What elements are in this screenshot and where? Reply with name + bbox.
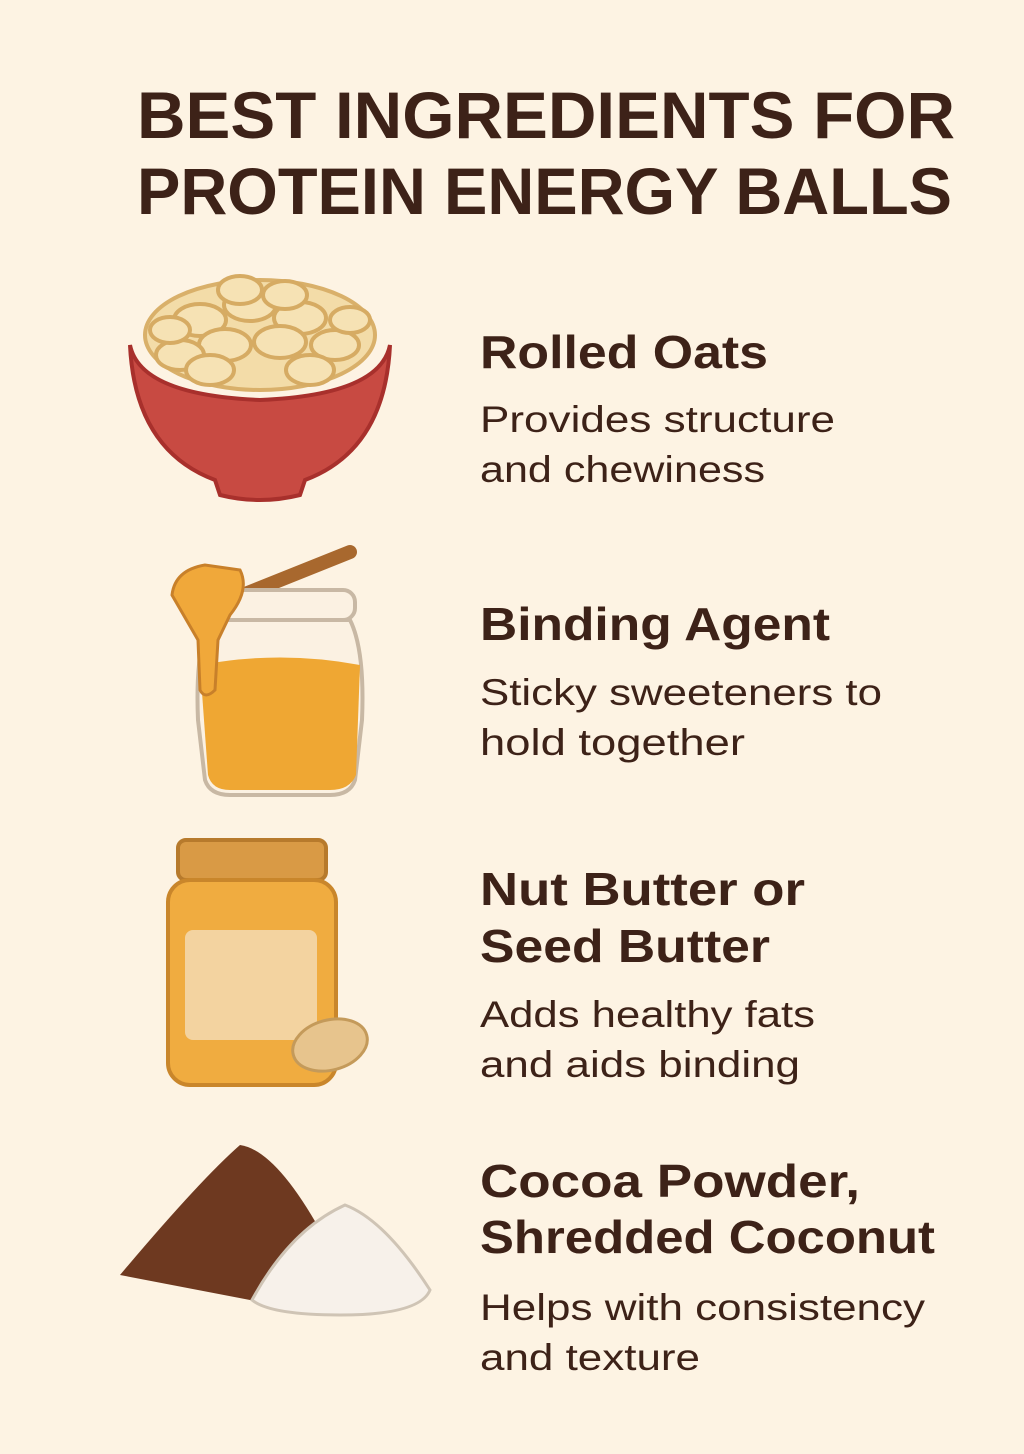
- text: binding agent: Sticky sweeteners to: [480, 672, 882, 713]
- text: cocoa coconut: Shredded Coconut: [480, 1211, 935, 1263]
- text: nut butter: Nut Butter or: [480, 863, 805, 915]
- text: nut butter: and aids binding: [480, 1044, 800, 1085]
- text: cocoa coconut: [480, 1155, 935, 1378]
- text: cocoa coconut: and texture: [480, 1337, 700, 1378]
- title: BEST INGREDIENTS FOR: [137, 78, 955, 152]
- title: [137, 78, 955, 228]
- text: cocoa coconut: Helps with consistency: [480, 1287, 926, 1328]
- icon: honey jar: [172, 552, 362, 795]
- icon: cocoa and coconut powder: [120, 1145, 430, 1315]
- icon: bowl of oats: [130, 276, 390, 500]
- text: nut butter: Seed Butter: [480, 920, 770, 972]
- title: PROTEIN ENERGY BALLS: [137, 154, 952, 228]
- text: rolled oats: [480, 326, 835, 490]
- text: nut butter: [480, 863, 815, 1085]
- text: binding agent: [480, 598, 882, 763]
- text: cocoa coconut: Cocoa Powder,: [480, 1155, 860, 1207]
- text: binding agent: hold together: [480, 722, 745, 763]
- text: binding agent: Binding Agent: [480, 598, 830, 650]
- text: nut butter: Adds healthy fats: [480, 994, 815, 1035]
- text: rolled oats: Provides structure: [480, 399, 835, 440]
- text: rolled oats: Rolled Oats: [480, 326, 768, 378]
- icon: peanut butter jar: [168, 840, 373, 1085]
- text: rolled oats: and chewiness: [480, 449, 765, 490]
